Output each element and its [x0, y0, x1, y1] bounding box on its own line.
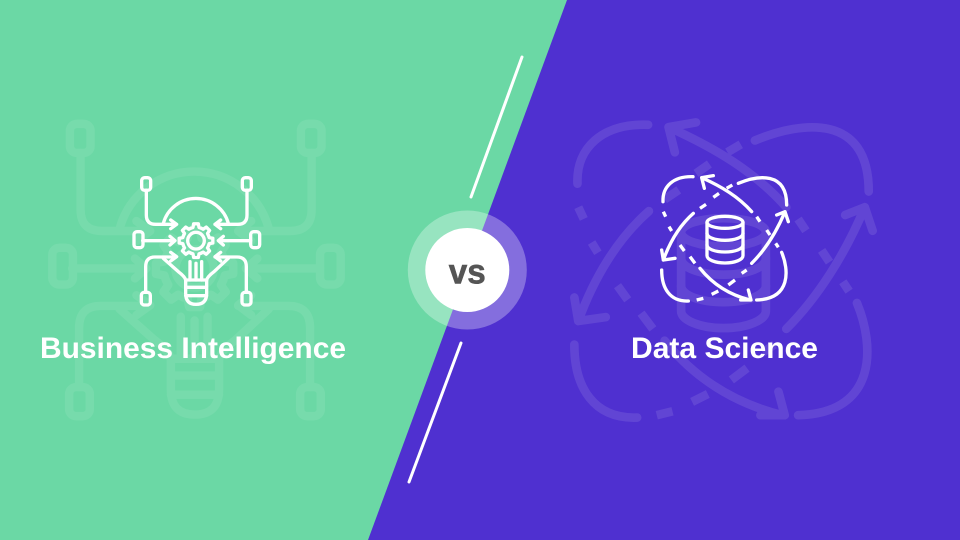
divider line: top: [471, 57, 522, 197]
badge label: vs: [449, 252, 486, 292]
watermark icon: business intelligence: [52, 124, 341, 416]
icon: lightbulb with gear and arrows: [134, 178, 260, 305]
vs badge: [408, 210, 527, 330]
watermark icon: data science: [574, 122, 873, 418]
divider line: bottom: [409, 343, 461, 482]
heading: Business Intelligence: Business Intelligence: [40, 332, 346, 365]
heading: Data Science: Data Science: [631, 332, 818, 365]
badge outer ring: [408, 210, 527, 330]
badge inner circle: [425, 228, 509, 312]
icon: database with orbits: [662, 176, 788, 301]
background: purple right panel: [368, 0, 960, 540]
